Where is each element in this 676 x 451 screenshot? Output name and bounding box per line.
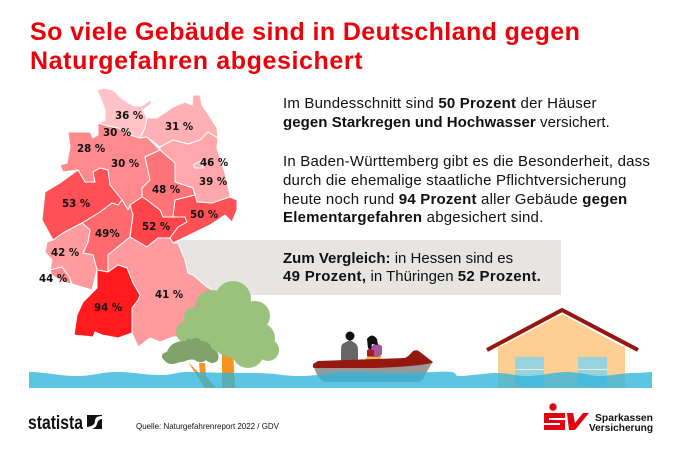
map labels: 50 % <box>190 209 218 221</box>
map labels: 31 % <box>165 121 193 133</box>
icon: boat with people <box>313 332 433 382</box>
title: So viele Gebäude sind in Deutschland gegen <box>30 18 580 46</box>
map labels: 30 % <box>111 158 139 170</box>
text block: Baden-Württemberg <box>283 153 650 226</box>
title <box>30 18 580 75</box>
map of Germany <box>42 85 237 347</box>
Sparkassen Versicherung logo: Versicherung <box>589 422 653 434</box>
Sparkassen Versicherung logo: Sparkassen <box>595 412 653 424</box>
state: Brandenburg <box>160 132 230 203</box>
text block: national average: Im Bundesschnitt sind 50 Prozent der Häuser <box>283 95 597 112</box>
state: Schleswig-Holstein <box>95 85 152 138</box>
text block: Baden-Württemberg: Elementargefahren abgesichert sind. <box>283 209 543 226</box>
map labels: 28 % <box>77 143 105 155</box>
text block: Baden-Württemberg: heute noch rund 94 Prozent aller Gebäude gegen <box>283 191 627 208</box>
state: Niedersachsen <box>60 123 160 210</box>
state: Mecklenburg-Vorpommern <box>140 95 218 147</box>
text block: national average: gegen Starkregen und Hochwasser versichert. <box>283 114 610 131</box>
map labels: 94 % <box>94 302 122 314</box>
icon: house <box>487 310 638 388</box>
map labels: 46 % <box>200 157 228 169</box>
Sparkassen Versicherung logo <box>544 403 653 434</box>
icon: small tree <box>162 338 219 388</box>
state: Saarland <box>50 267 71 284</box>
state: Hessen <box>82 200 133 272</box>
text block: Baden-Württemberg: In Baden-Württemberg gibt es die Besonderheit, dass <box>283 153 650 170</box>
map labels: 49% <box>95 228 120 240</box>
title: Naturgefahren abgesichert <box>30 47 363 75</box>
icon: large tree <box>176 281 279 388</box>
state: Bayern <box>108 237 228 347</box>
map labels: 30 % <box>103 127 131 139</box>
state: Nordrhein-Westfalen <box>42 168 122 240</box>
comparison box <box>170 240 561 295</box>
text block: Baden-Württemberg: durch die ehemalige staatliche Pflichtversicherung <box>283 172 627 189</box>
text block: comparison: 49 Prozent, in Thüringen 52 Prozent. <box>283 268 541 285</box>
text block: comparison <box>283 250 541 285</box>
hull <box>313 363 432 382</box>
map labels: 39 % <box>199 176 227 188</box>
text block: national average <box>283 95 610 131</box>
state: Rheinland-Pfalz <box>45 223 97 290</box>
map labels: 48 % <box>152 184 180 196</box>
state: Baden-Württemberg <box>74 265 140 338</box>
map labels: 44 % <box>39 273 67 285</box>
state: Sachsen <box>170 195 237 243</box>
source: Quelle: Naturgefahrenreport 2022 / GDV <box>136 421 279 431</box>
map labels: 42 % <box>51 247 79 259</box>
state: Berlin <box>193 160 203 168</box>
map labels <box>39 110 228 314</box>
text block: comparison: Zum Vergleich: in Hessen sind es <box>283 250 513 266</box>
water <box>29 372 652 388</box>
map labels: 41 % <box>155 289 183 301</box>
map labels: 53 % <box>62 198 90 210</box>
state: Thüringen <box>130 197 187 247</box>
person: man <box>341 340 358 361</box>
statista logo: statista <box>28 413 83 434</box>
state: Sachsen-Anhalt <box>142 150 195 217</box>
map labels: 36 % <box>115 110 143 122</box>
map labels: 52 % <box>142 221 170 233</box>
person: woman <box>367 343 382 360</box>
